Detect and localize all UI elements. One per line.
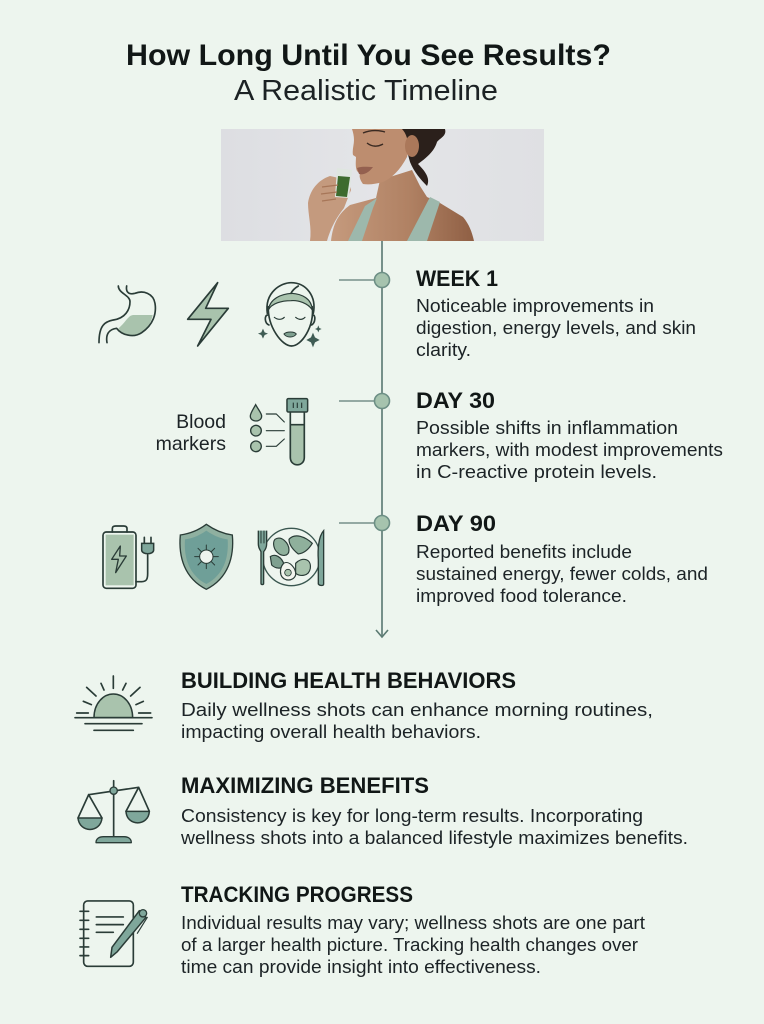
title: How Long Until You See Results? — [126, 39, 611, 72]
section: tracking progress — [181, 882, 645, 977]
label: blood markers: Blood — [176, 411, 226, 433]
section: building health behaviors — [181, 668, 653, 742]
section: maximizing benefits: wellness shots into a balanced lifestyle maximizes benefits. — [180, 827, 688, 848]
icon: energy bolt — [188, 283, 228, 346]
icon: stomach — [99, 286, 155, 343]
milestone: week 1 — [416, 266, 696, 360]
section: maximizing benefits: MAXIMIZING BENEFITS — [181, 773, 429, 798]
milestone: day 90 — [416, 511, 708, 606]
icon: notebook and pen — [80, 901, 147, 966]
milestone: day 90: improved food tolerance. — [416, 585, 627, 606]
label: blood markers — [156, 411, 226, 455]
milestone: day 30: Possible shifts in inflammation — [416, 417, 678, 438]
section: tracking progress: time can provide insight into effectiveness. — [181, 956, 541, 977]
photo: woman drinking wellness shot — [221, 129, 544, 241]
milestone: week 1: Noticeable improvements in — [416, 295, 654, 316]
timeline — [339, 241, 390, 637]
icon: battery charging — [103, 526, 154, 588]
milestone: day 30: DAY 30 — [416, 388, 495, 413]
milestone: day 30 — [416, 388, 723, 482]
milestone: day 30: in C-reactive protein levels. — [416, 461, 657, 482]
milestone: day 90: Reported benefits include — [416, 541, 632, 562]
section: maximizing benefits: Consistency is key for long-term results. Incorporating — [181, 805, 643, 826]
icon: blood test tube — [250, 399, 308, 465]
milestone: week 1: clarity. — [416, 339, 471, 360]
milestone: day 90: DAY 90 — [416, 511, 496, 536]
milestone: week 1: digestion, energy levels, and skin — [416, 317, 696, 338]
section: building health behaviors: impacting overall health behaviors. — [181, 721, 481, 742]
icon: immune shield — [180, 524, 233, 589]
milestone: day 90: sustained energy, fewer colds, and — [416, 563, 708, 584]
section: tracking progress: of a larger health picture. Tracking health changes over — [181, 934, 638, 955]
section: building health behaviors: Daily wellness shots can enhance morning routines, — [181, 699, 653, 720]
icon: sunrise — [75, 676, 152, 730]
icon: healthy plate — [258, 528, 324, 586]
title — [126, 39, 611, 107]
icon: clear skin face — [258, 283, 322, 347]
milestone: day 30: markers, with modest improvements — [416, 439, 723, 460]
icon: balance scale — [78, 781, 149, 843]
title: A Realistic Timeline — [234, 75, 498, 107]
section: maximizing benefits — [180, 773, 688, 848]
section: tracking progress: TRACKING PROGRESS — [181, 882, 413, 907]
label: blood markers: markers — [156, 433, 226, 455]
section: tracking progress: Individual results may vary; wellness shots are one part — [181, 912, 645, 933]
section: building health behaviors: BUILDING HEALTH BEHAVIORS — [181, 668, 516, 693]
milestone: week 1: WEEK 1 — [416, 266, 498, 291]
